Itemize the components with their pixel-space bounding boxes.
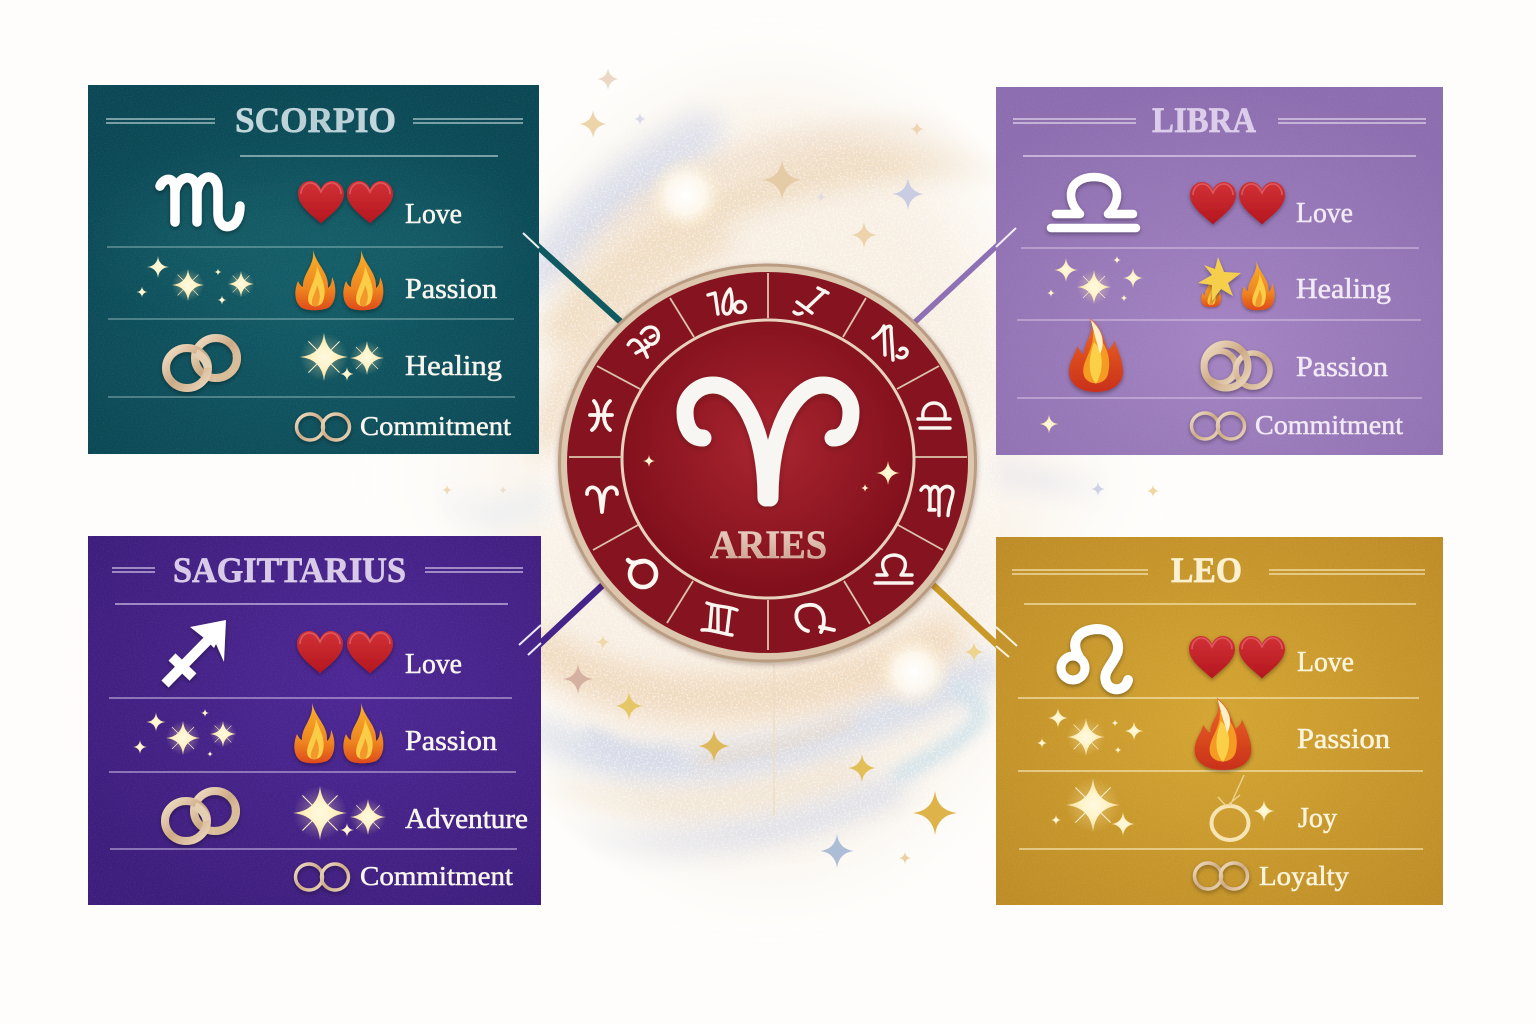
label: commitment: Commitment <box>360 861 514 891</box>
label: commitment: Commitment <box>360 411 512 441</box>
label: passion: Passion <box>1296 351 1389 383</box>
icon: flame <box>1069 318 1123 392</box>
icon: hearts <box>297 631 393 674</box>
label: love: Love <box>1297 646 1354 678</box>
icon: stars <box>293 786 386 840</box>
icon: libra sign <box>1051 177 1136 228</box>
icon: flames <box>294 703 383 763</box>
icon: hearts <box>1189 636 1285 678</box>
label: joy: Joy <box>1298 802 1337 834</box>
label: healing: Healing <box>1296 273 1391 305</box>
icon: stars <box>300 333 384 381</box>
icon: ring with star <box>1212 775 1275 840</box>
panel: sagittarius <box>88 536 541 905</box>
label: passion: Passion <box>1297 723 1391 755</box>
decorative stars <box>442 68 1159 868</box>
heading: LEO <box>1171 550 1242 590</box>
card background <box>996 537 1443 905</box>
wheel rim <box>560 265 976 661</box>
wheel disc <box>567 272 968 653</box>
connector: sagittarius to aries <box>527 582 606 656</box>
icon: sparkles <box>1037 708 1144 756</box>
wheel sparkles <box>643 455 900 492</box>
aries main glyph <box>685 385 851 498</box>
icon: sparkles <box>133 709 236 757</box>
label: love: Love <box>405 198 462 230</box>
icon: small rings <box>296 864 348 890</box>
icon: scorpio sign <box>160 177 240 227</box>
heading: LIBRA <box>1152 100 1256 140</box>
icon: sparkles <box>1047 256 1143 304</box>
icon: flame <box>1195 697 1251 770</box>
icon: sparkle <box>1040 414 1058 434</box>
icon: small rings <box>1194 863 1248 889</box>
icon: stars <box>1051 778 1135 836</box>
icon: small rings <box>296 414 350 440</box>
icon: stacked rings <box>1204 344 1270 388</box>
label: adventure: Adventure <box>405 803 528 835</box>
galaxy backdrop <box>466 88 1082 875</box>
icon: hearts <box>298 181 393 224</box>
card background <box>88 85 539 454</box>
icon: leo sign <box>1061 629 1128 689</box>
label: loyalty: Loyalty <box>1259 861 1350 891</box>
icon: star and flames <box>1198 257 1275 310</box>
icon: hearts <box>1190 182 1285 224</box>
icon: flames <box>295 250 383 310</box>
icon: sparkles <box>136 256 254 304</box>
panel: scorpio <box>88 85 539 454</box>
card background <box>996 87 1443 455</box>
panel: leo <box>996 537 1443 905</box>
icon: rings <box>166 338 237 388</box>
heading: SCORPIO <box>235 100 396 140</box>
icon: small rings <box>1192 413 1244 439</box>
label: love: Love <box>1296 197 1353 229</box>
card background <box>88 536 541 905</box>
label: healing: Healing <box>405 350 502 382</box>
heading: SAGITTARIUS <box>173 550 406 590</box>
connector: libra to aries <box>915 228 1016 322</box>
central zodiac wheel <box>560 265 976 661</box>
label: passion: Passion <box>405 725 498 757</box>
zodiac glyphs ring <box>587 288 953 635</box>
connector: scorpio to aries <box>522 232 622 323</box>
icon: rings <box>165 791 236 841</box>
label: commitment: Commitment <box>1255 410 1404 440</box>
panel: libra <box>996 87 1443 455</box>
label: passion: Passion <box>405 273 498 305</box>
connector: leo to aries <box>932 584 1010 657</box>
aries label: ARIES <box>710 522 827 567</box>
label: love: Love <box>405 648 462 680</box>
icon: sagittarius sign <box>165 620 226 684</box>
